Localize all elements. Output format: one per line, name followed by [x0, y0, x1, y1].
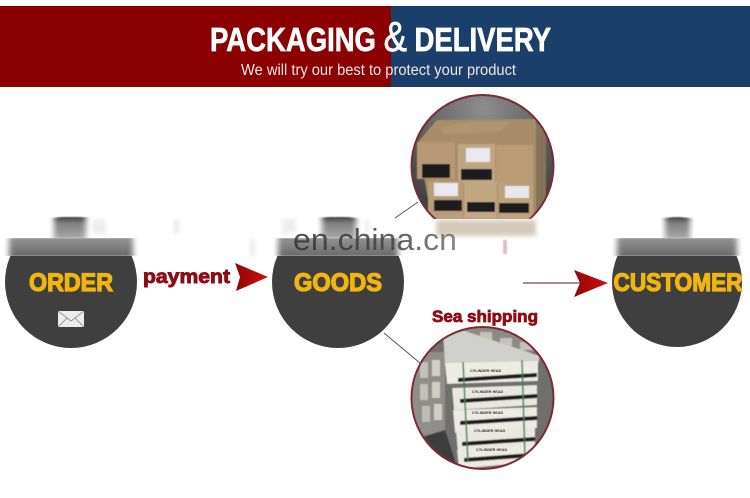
label: order: ORDER: [29, 269, 113, 297]
circle: customer: [612, 216, 742, 347]
arrow: payment: [235, 263, 268, 291]
photo: sea shipping crates: CYLINDER HEAD: [476, 448, 507, 452]
watermark: en.china.cn: [293, 222, 457, 257]
icon: envelope: [58, 311, 84, 327]
arrow: to customer: [523, 270, 608, 297]
photo: sea shipping crates: CYLINDER HEAD: [470, 369, 501, 373]
circle: order: [4, 216, 138, 348]
header banner: [0, 6, 750, 87]
photo: sea shipping crates: CYLINDER HEAD: [472, 390, 503, 394]
connector lines to photos: [384, 202, 420, 363]
blurred artifacts: [92, 219, 370, 256]
photo: cartons: [410, 94, 554, 219]
payment label: payment: [143, 267, 231, 288]
watermark band over cartons photo: [404, 219, 560, 254]
title: PACKAGING & DELIVERY: [210, 13, 551, 60]
subtitle: We will try our best to protect your product: [241, 62, 517, 79]
label: goods: GOODS: [294, 269, 382, 297]
photo: sea shipping crates: CYLINDER HEAD: [474, 429, 505, 433]
sea shipping label: Sea shipping: [432, 308, 538, 326]
photo: sea shipping crates: [410, 326, 556, 472]
photo: sea shipping crates: CYLINDER HEAD: [472, 411, 503, 415]
circle: goods: [272, 216, 404, 348]
